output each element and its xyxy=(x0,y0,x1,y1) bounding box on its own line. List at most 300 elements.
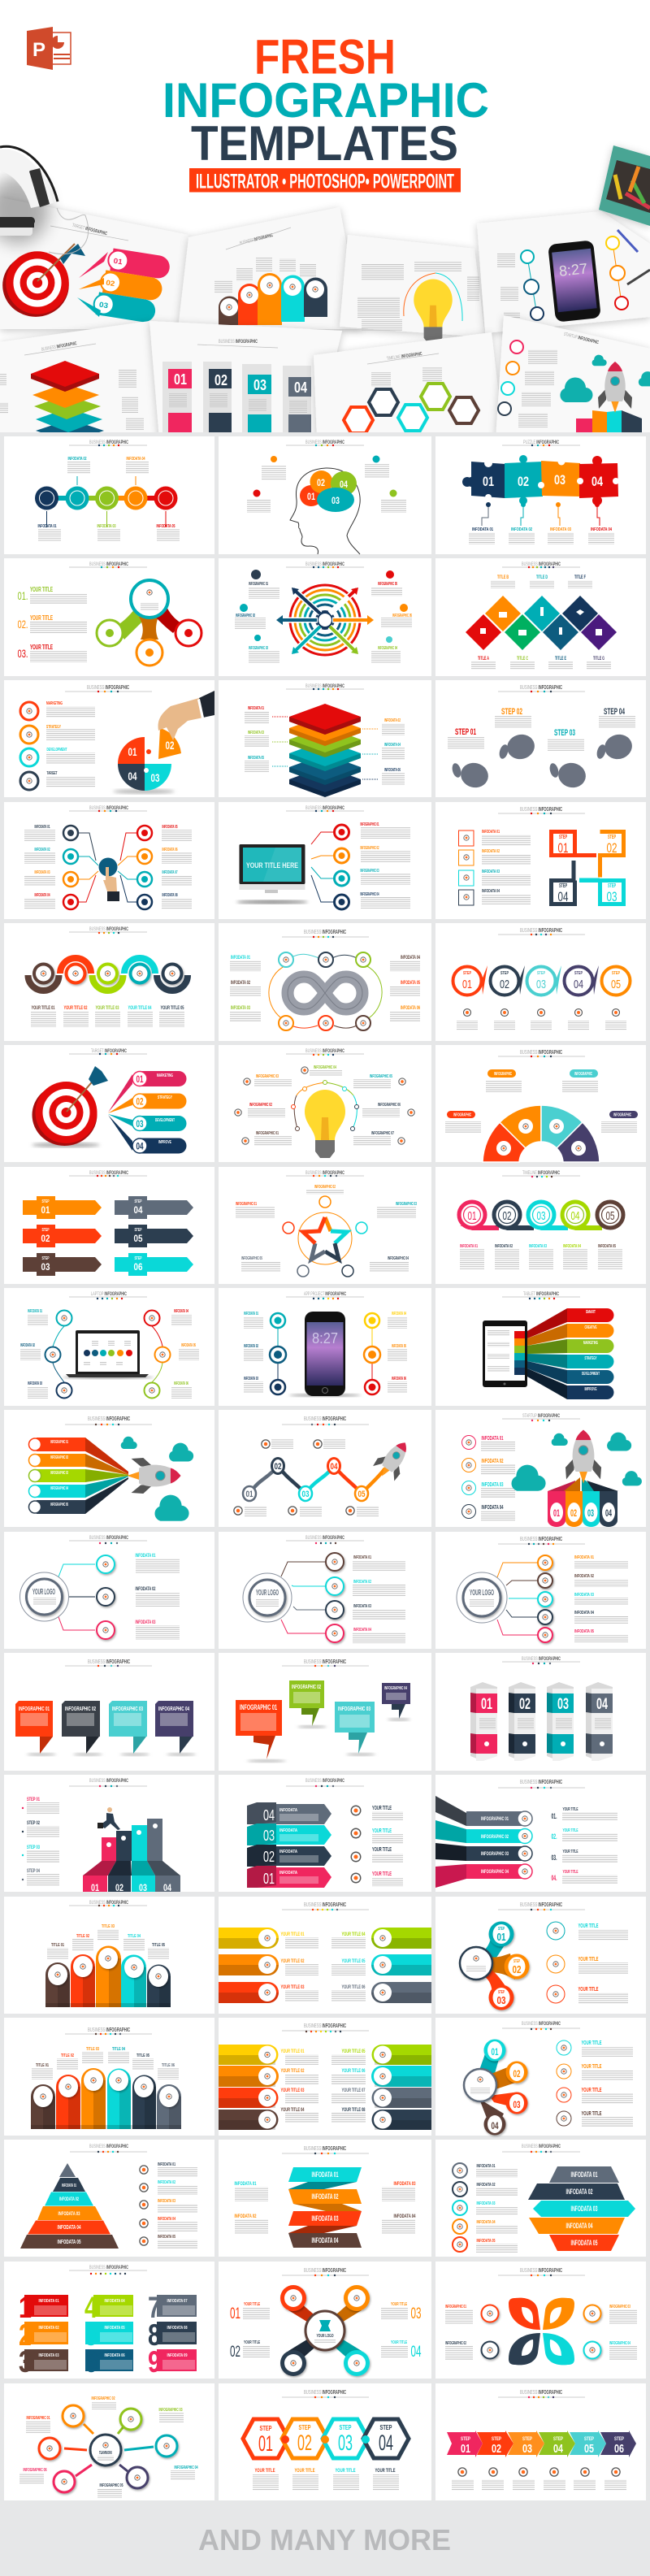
title: FRESH INFOGRAPHIC TEMPLATES xyxy=(162,29,489,171)
tile heading: BUSINESS INFOGRAPHIC xyxy=(304,2146,346,2152)
columns: 02 xyxy=(519,1696,531,1713)
tile: tablet with ribbons xyxy=(436,1288,646,1406)
text blocks: INFODATA 05 xyxy=(181,1343,196,1348)
text blocks xyxy=(236,1185,417,1273)
tile heading: BUSINESS INFOGRAPHIC xyxy=(89,2144,128,2149)
diagram: logo circle: YOUR LOGO xyxy=(32,1588,55,1597)
diagram: stairs: 04 xyxy=(163,1882,171,1893)
diagram: blobs xyxy=(460,1921,530,2010)
text blocks: TITLE F xyxy=(574,575,586,580)
text blocks: INFODATA 01 xyxy=(460,1244,478,1249)
tile heading: BUSINESS INFOGRAPHIC xyxy=(520,1050,562,1056)
tile heading: BUSINESS INFOGRAPHIC xyxy=(522,562,561,567)
text blocks: INFOGRAPHIC 02 xyxy=(445,2341,466,2346)
diagram: ring and star xyxy=(283,1196,367,1277)
tile: semicircle donut xyxy=(436,1045,646,1162)
tile: ribbon bars with circles xyxy=(436,1775,646,1892)
text blocks: INFODATA 04 xyxy=(384,743,401,748)
bubbles: INFOGRAPHIC 04 xyxy=(158,1706,189,1712)
banner: software list: ILLUSTRATOR • PHOTOSHOP• POWERPOINT xyxy=(196,171,454,193)
list: YOUR TITLE xyxy=(582,2111,602,2117)
image: laptop xyxy=(63,1330,154,1379)
pyramid layers: INFODATA 03 xyxy=(58,2212,80,2217)
diagram: donut sectors xyxy=(483,1105,600,1162)
text blocks: TITLE 03 xyxy=(102,1924,115,1929)
tile: logo with four blobs xyxy=(219,2262,431,2379)
text blocks: YOUR TITLE xyxy=(562,1850,578,1854)
text blocks: INFODATA 03 xyxy=(353,1604,371,1609)
small circles xyxy=(326,1553,344,1642)
diagram: stairs: 01 xyxy=(91,1882,99,1893)
arrows: STEP xyxy=(135,1228,142,1233)
pyramid layers: INFODATA 02 xyxy=(59,2197,79,2202)
title: FRESH INFOGRAPHIC TEMPLATES: FRESH xyxy=(254,29,396,85)
text blocks: INFODATA 01 xyxy=(472,527,493,532)
tile: stacked layers xyxy=(219,680,431,797)
text blocks: INFOGRAPHIC 04 xyxy=(314,1065,336,1070)
tile: target with pills xyxy=(4,1045,214,1162)
bars xyxy=(219,2045,431,2130)
diagram: blobs: YOUR LOGO xyxy=(317,2334,334,2339)
text blocks: INFODATA 02 xyxy=(511,527,532,532)
tile heading xyxy=(502,2022,580,2030)
tile heading xyxy=(282,2390,369,2398)
blocks xyxy=(19,2291,197,2379)
diagram: step rings: 02 xyxy=(500,978,509,991)
diagram: stairs xyxy=(83,1819,180,1893)
diagram: puzzle pieces: 02 xyxy=(518,474,529,489)
diagram: blobs: 03 xyxy=(497,1994,505,2006)
tile: arrow tabs xyxy=(4,1167,214,1284)
sheet: numbered columns slide: 03 xyxy=(254,377,266,393)
arrows: STEP xyxy=(42,1256,50,1261)
text blocks: TITLE 04 xyxy=(112,2047,125,2052)
arrows: INFODATA xyxy=(280,1828,297,1833)
text blocks: YOUR TITLE 04 xyxy=(128,1006,152,1011)
sheet: hexagon slide: TIMELINE INFOGRAPHIC xyxy=(387,352,422,362)
pills with numbers: MARKETING xyxy=(157,1073,173,1078)
text blocks: INFODATA 01 xyxy=(234,2182,257,2187)
text blocks: INFODATA 06 xyxy=(162,848,178,852)
text blocks: INFODATA 01 xyxy=(37,524,57,529)
icons and text: YOUR TITLE xyxy=(372,1871,392,1877)
tile: four speech bubbles xyxy=(4,1653,214,1771)
chevrons: 02 xyxy=(492,2442,501,2456)
list: INFODATA 04 xyxy=(476,2220,496,2225)
tile heading: BUSINESS INFOGRAPHIC xyxy=(304,1416,346,1422)
bubbles: INFOGRAPHIC 04 xyxy=(384,1686,407,1691)
icons and text: YOUR TITLE xyxy=(372,1806,392,1811)
tile heading xyxy=(498,2390,585,2398)
diagram: half rings xyxy=(28,958,188,991)
list with icons: INFODATA 03 xyxy=(481,1482,504,1488)
text blocks: 02. xyxy=(551,1832,557,1841)
text list: YOUR TITLE xyxy=(30,614,53,622)
nodes: 02 xyxy=(275,1462,281,1472)
blocks: 5 xyxy=(84,2318,98,2352)
tile heading xyxy=(69,2266,147,2275)
image: running businessman xyxy=(98,1807,120,1830)
pyramid layers: INFODATA 05 xyxy=(57,2240,81,2245)
tile: six side bars xyxy=(219,1897,431,2014)
nodes: 03 xyxy=(302,1490,309,1499)
step numbers: 03 xyxy=(606,889,618,904)
text blocks: INFODATA 03 xyxy=(550,527,571,532)
sheet: numbered columns slide: BUSINESS INFOGRAPHIC xyxy=(219,340,258,345)
tile heading xyxy=(282,2146,369,2154)
text blocks xyxy=(32,2047,179,2079)
sheet: layers slide xyxy=(0,321,159,442)
tile heading xyxy=(69,1171,147,1177)
text blocks xyxy=(460,1244,622,1269)
icons in sectors xyxy=(501,1124,581,1151)
text blocks: INFODATA 03 xyxy=(135,1620,156,1625)
list xyxy=(547,1922,628,2004)
image: rocket xyxy=(370,1435,417,1484)
text blocks xyxy=(234,2182,416,2234)
tile heading: BUSINESS INFOGRAPHIC xyxy=(306,1171,344,1176)
labels and text: INFOGRAPHIC xyxy=(453,1113,471,1118)
text blocks: INFODATA 02 xyxy=(20,1343,35,1348)
text blocks: INFODATA 03 xyxy=(244,1377,258,1381)
tile heading xyxy=(286,440,364,446)
blocks: INFODATA 09 xyxy=(167,2353,188,2358)
text blocks: INFOGRAPHIC 02 xyxy=(236,614,255,618)
image: clouds and rocket: 03 xyxy=(587,1507,594,1519)
tile: hexagon stack xyxy=(436,2140,646,2257)
image: rocket and clouds xyxy=(121,1437,193,1521)
tile heading: BUSINESS INFOGRAPHIC xyxy=(87,685,129,691)
text blocks: INFODATA 02 xyxy=(384,718,401,723)
text blocks: INFOGRAPHIC 05 xyxy=(378,582,397,587)
text blocks: INFOGRAPHIC 02 xyxy=(314,1185,336,1190)
arrows: 04 xyxy=(263,1807,275,1824)
diagram: step rings: STEP xyxy=(463,971,472,976)
list with icons xyxy=(20,701,95,790)
text blocks: INFOGRAPHIC 02 xyxy=(249,1103,272,1108)
tile: logo with four branches xyxy=(219,1532,431,1649)
diagram: spirals xyxy=(459,1202,623,1230)
tile: metaball four steps xyxy=(436,2018,646,2136)
tile heading xyxy=(69,1292,147,1299)
tile heading xyxy=(282,1659,369,1667)
list: INFODATA 02 xyxy=(158,2180,176,2185)
arrows: STEP xyxy=(42,1199,50,1204)
icons and text: YOUR TITLE xyxy=(372,1847,392,1853)
text list: 01. xyxy=(18,589,28,602)
text blocks: INFODATA 01 xyxy=(353,1555,371,1560)
tile heading: BUSINESS INFOGRAPHIC xyxy=(306,1536,344,1541)
text blocks: YOUR TITLE 02 xyxy=(281,1959,305,1964)
text blocks: YOUR TITLE xyxy=(294,2469,315,2474)
diagram: blobs: 01 xyxy=(497,1931,505,1943)
tile heading: BUSINESS INFOGRAPHIC xyxy=(88,2027,130,2033)
text list: INFODATA 04 xyxy=(482,889,500,894)
tile: hub with arrows xyxy=(4,2383,214,2500)
diagram: puzzle circle: 04 xyxy=(128,770,137,783)
tile: five step rings xyxy=(436,923,646,1041)
image: clouds and rocket: 02 xyxy=(570,1507,577,1519)
sheet: target slide: 01 xyxy=(113,257,123,266)
text blocks xyxy=(471,575,611,670)
chevrons: 06 xyxy=(614,2442,624,2456)
tile heading: BUSINESS INFOGRAPHIC xyxy=(520,1780,562,1785)
text blocks: INFODATA 06 xyxy=(174,1381,188,1386)
blocks: 7 xyxy=(148,2291,161,2324)
text blocks: INFODATA 03 xyxy=(28,1381,42,1386)
tile heading xyxy=(69,806,147,812)
tile: three linked circles xyxy=(4,558,214,676)
bubbles xyxy=(15,1701,196,1756)
text blocks: INFOGRAPHIC 03 xyxy=(609,2305,630,2309)
tile heading xyxy=(286,562,364,568)
arrows: STEP xyxy=(42,1228,50,1233)
diagram: puzzle circle xyxy=(113,728,181,794)
text blocks: INFODATA 05 xyxy=(392,1344,406,1349)
tile heading xyxy=(286,1292,364,1299)
text blocks xyxy=(574,1555,628,1642)
arrows: STEP xyxy=(135,1256,142,1261)
step numbers: 04 xyxy=(557,889,569,904)
diagram: logo circle xyxy=(20,1564,95,1630)
tile heading xyxy=(286,806,364,812)
blocks: INFODATA 03 xyxy=(39,2353,59,2358)
text blocks: YOUR TITLE xyxy=(375,2469,395,2474)
hexagons: 03 xyxy=(338,2431,353,2455)
diagram: funnel bars: INFOGRAPHIC 01 xyxy=(50,1440,68,1445)
text blocks: INFOGRAPHIC 04 xyxy=(361,892,379,897)
tile heading xyxy=(286,1536,364,1544)
diagram: spirals: 02 xyxy=(502,1209,512,1223)
tile heading xyxy=(286,1779,364,1787)
diagram: blobs xyxy=(464,2040,528,2136)
tile: connected squares xyxy=(436,802,646,919)
ribbons: SMART xyxy=(586,1310,596,1315)
diagram: funnel bars: INFOGRAPHIC 04 xyxy=(50,1486,68,1491)
tile heading xyxy=(502,1657,580,1664)
text list: INFODATA 01 xyxy=(482,830,500,835)
arrows: 02 xyxy=(41,1233,50,1244)
text blocks: INFOGRAPHIC 01 xyxy=(26,2416,50,2421)
image: phone: 8:27 xyxy=(312,1330,338,1347)
text blocks: YOUR TITLE 01 xyxy=(281,1932,305,1937)
tile heading: TABLET INFOGRAPHIC xyxy=(523,1292,559,1297)
list: INFODATA 01 xyxy=(158,2162,176,2167)
ribbons xyxy=(436,1796,532,1888)
list: YOUR TITLE xyxy=(582,2064,602,2070)
blocks: 8 xyxy=(148,2318,161,2352)
ribbons: CREATIVE xyxy=(585,1325,597,1330)
hexagons: STEP xyxy=(380,2424,392,2431)
text blocks xyxy=(47,1924,169,1959)
tile: infinity xyxy=(219,923,431,1041)
diagram: funnel bars: INFOGRAPHIC 03 xyxy=(50,1471,68,1476)
image: box of crayons xyxy=(599,145,650,284)
list with icons: DEVELOPMENT xyxy=(47,748,67,752)
step labels: STEP 01 xyxy=(455,727,476,737)
labels and text: INFOGRAPHIC xyxy=(494,1072,512,1077)
text blocks xyxy=(20,2396,198,2498)
text blocks: INFODATA 01 xyxy=(248,706,264,711)
diagram: puzzle pieces: 04 xyxy=(592,474,603,489)
tile: five arched columns xyxy=(4,1897,214,2014)
diagram: blobs: STEP xyxy=(498,1990,505,1995)
list with icons: INFODATA 04 xyxy=(481,1505,504,1511)
text blocks: YOUR TITLE xyxy=(391,2340,407,2345)
tile heading xyxy=(69,562,147,568)
list: INFODATA 03 xyxy=(476,2201,496,2206)
step labels: STEP 04 xyxy=(604,707,626,717)
hexagon bands: INFODATA 01 xyxy=(570,2171,598,2179)
chevrons: STEP xyxy=(522,2437,532,2442)
tile heading: PUZZLE INFOGRAPHIC xyxy=(523,440,559,445)
sheet: target slide: 03 xyxy=(98,301,109,310)
tile: smartphone xyxy=(219,1288,431,1406)
text blocks: YOUR TITLE 05 xyxy=(341,1959,366,1964)
text blocks xyxy=(20,1309,199,1399)
step numbers: STEP xyxy=(608,835,616,840)
text blocks: INFODATA 04 xyxy=(353,1628,371,1633)
list: INFODATA 05 xyxy=(476,2239,496,2244)
text blocks: YOUR TITLE 05 xyxy=(161,1006,184,1011)
text list: 03. xyxy=(18,647,28,660)
text blocks xyxy=(31,1006,184,1027)
diagram: logo circle: YOUR LOGO xyxy=(470,1589,494,1598)
tile heading xyxy=(286,1049,364,1056)
text blocks: INFODATA 05 xyxy=(401,981,420,986)
text blocks xyxy=(469,527,614,544)
tile heading xyxy=(286,1171,364,1177)
hexagon bands: INFODATA 04 xyxy=(566,2222,593,2230)
text blocks: INFOGRAPHIC 03 xyxy=(249,646,268,651)
tile heading: BUSINESS INFOGRAPHIC xyxy=(304,930,346,935)
ribbons: MARKETING xyxy=(583,1341,598,1346)
tile heading xyxy=(498,1537,585,1545)
list: INFODATA 01 xyxy=(476,2164,496,2169)
text blocks: INFOGRAPHIC 01 xyxy=(445,2305,466,2309)
arrows: 03 xyxy=(41,1261,50,1273)
image: hand xyxy=(158,691,214,740)
diagram: step rings: 03 xyxy=(536,978,546,991)
text blocks: YOUR TITLE 07 xyxy=(341,2088,366,2093)
text blocks xyxy=(37,457,180,542)
pills with numbers: 03 xyxy=(136,1118,144,1130)
diagram: blobs xyxy=(280,2285,370,2376)
nodes xyxy=(243,1457,368,1501)
text blocks: 01 xyxy=(230,2305,240,2322)
bands: INFODATA 02 xyxy=(312,2192,338,2201)
text blocks: 04. xyxy=(551,1874,557,1882)
hexagons: 01 xyxy=(258,2431,273,2456)
text list: INFODATA 03 xyxy=(482,870,500,874)
tile heading: BUSINESS INFOGRAPHIC xyxy=(304,2390,346,2396)
list: INFODATA 05 xyxy=(158,2235,176,2240)
circles xyxy=(32,962,184,985)
ribbons: INFOGRAPHIC 03 xyxy=(481,1852,509,1857)
text blocks: INFOGRAPHIC 06 xyxy=(378,1103,401,1108)
tile heading xyxy=(502,440,580,446)
text blocks: YOUR TITLE 03 xyxy=(281,2088,305,2093)
sheet: phone slide: 8:27 xyxy=(558,260,588,280)
text list: STEP 03 xyxy=(27,1845,40,1850)
pills with numbers: IMPROVE xyxy=(158,1140,171,1145)
nodes: 04 xyxy=(330,1462,338,1472)
blocks: INFODATA 05 xyxy=(104,2326,125,2331)
pills with numbers: 04 xyxy=(136,1141,144,1152)
text blocks: TITLE B xyxy=(497,575,509,580)
text blocks xyxy=(135,1554,180,1640)
arrows: STEP xyxy=(135,1199,142,1204)
list: YOUR TITLE xyxy=(582,2088,602,2093)
text list xyxy=(18,586,87,662)
text blocks: INFODATA 04 xyxy=(34,893,50,898)
tile: numbered blocks one to nine xyxy=(4,2262,214,2379)
hexagon bands xyxy=(528,2166,635,2251)
text blocks: INFOGRAPHIC 03 xyxy=(256,1074,279,1079)
diagram: puzzle circle: 03 xyxy=(151,771,160,784)
diagram: head and brain: 03 xyxy=(332,495,340,506)
text blocks: TITLE 05 xyxy=(152,1943,165,1948)
tile heading xyxy=(502,562,580,568)
nodes: 05 xyxy=(358,1490,366,1499)
text blocks xyxy=(235,1065,414,1146)
small circles xyxy=(97,1555,115,1639)
text list: STEP 04 xyxy=(27,1869,40,1874)
tile heading: BUSINESS INFOGRAPHIC xyxy=(89,806,128,811)
text blocks: YOUR TITLE xyxy=(244,2302,260,2307)
diagram: linked circles xyxy=(35,476,177,527)
arrows: INFODATA xyxy=(280,1850,297,1854)
tile heading xyxy=(69,1536,147,1544)
tile: metaball three steps xyxy=(436,1897,646,2014)
tile heading: BUSINESS INFOGRAPHIC xyxy=(304,1659,346,1665)
text blocks: INFODATA 02 xyxy=(34,848,50,852)
text blocks: INFODATA 02 xyxy=(68,457,87,462)
sheet: numbered columns slide: 02 xyxy=(214,372,228,388)
diagram: step rings: STEP xyxy=(537,971,546,976)
icons and text xyxy=(457,1009,626,1030)
sheet: rocket slide xyxy=(496,315,650,439)
text blocks: INFODATA 02 xyxy=(135,1587,156,1592)
labels and text xyxy=(445,1069,638,1133)
tile heading xyxy=(69,927,147,934)
diagram: stairs: 02 xyxy=(115,1882,124,1893)
text blocks: INFOGRAPHIC 05 xyxy=(99,2483,124,2488)
bubbles: INFOGRAPHIC 03 xyxy=(112,1706,143,1712)
bubbles: INFOGRAPHIC 01 xyxy=(240,1703,277,1711)
list: INFODATA 02 xyxy=(476,2183,496,2188)
sheet: numbered columns slide xyxy=(150,321,342,439)
text blocks: INFODATA 02 xyxy=(574,1574,594,1579)
tile: stacked arrow blocks xyxy=(219,1775,431,1892)
tile heading xyxy=(502,1414,580,1421)
pills with numbers: STRATEGY xyxy=(158,1095,172,1100)
text blocks xyxy=(253,2469,399,2491)
text blocks: TITLE D xyxy=(536,575,548,580)
tile heading: BUSINESS INFOGRAPHIC xyxy=(89,1901,128,1906)
text blocks: 03 xyxy=(411,2305,421,2322)
blocks: 9 xyxy=(148,2345,161,2379)
text blocks: INFODATA 06 xyxy=(384,768,401,773)
blocks: INFODATA 07 xyxy=(167,2299,188,2304)
tile heading xyxy=(282,2023,369,2032)
icons and text xyxy=(247,455,406,513)
blocks: 3 xyxy=(19,2345,32,2379)
text blocks: YOUR TITLE 01 xyxy=(31,1006,55,1011)
blocks: INFODATA 08 xyxy=(167,2326,188,2331)
tile heading: BUSINESS INFOGRAPHIC xyxy=(304,1902,346,1908)
ribbons: DEVELOPMENT xyxy=(582,1372,600,1377)
